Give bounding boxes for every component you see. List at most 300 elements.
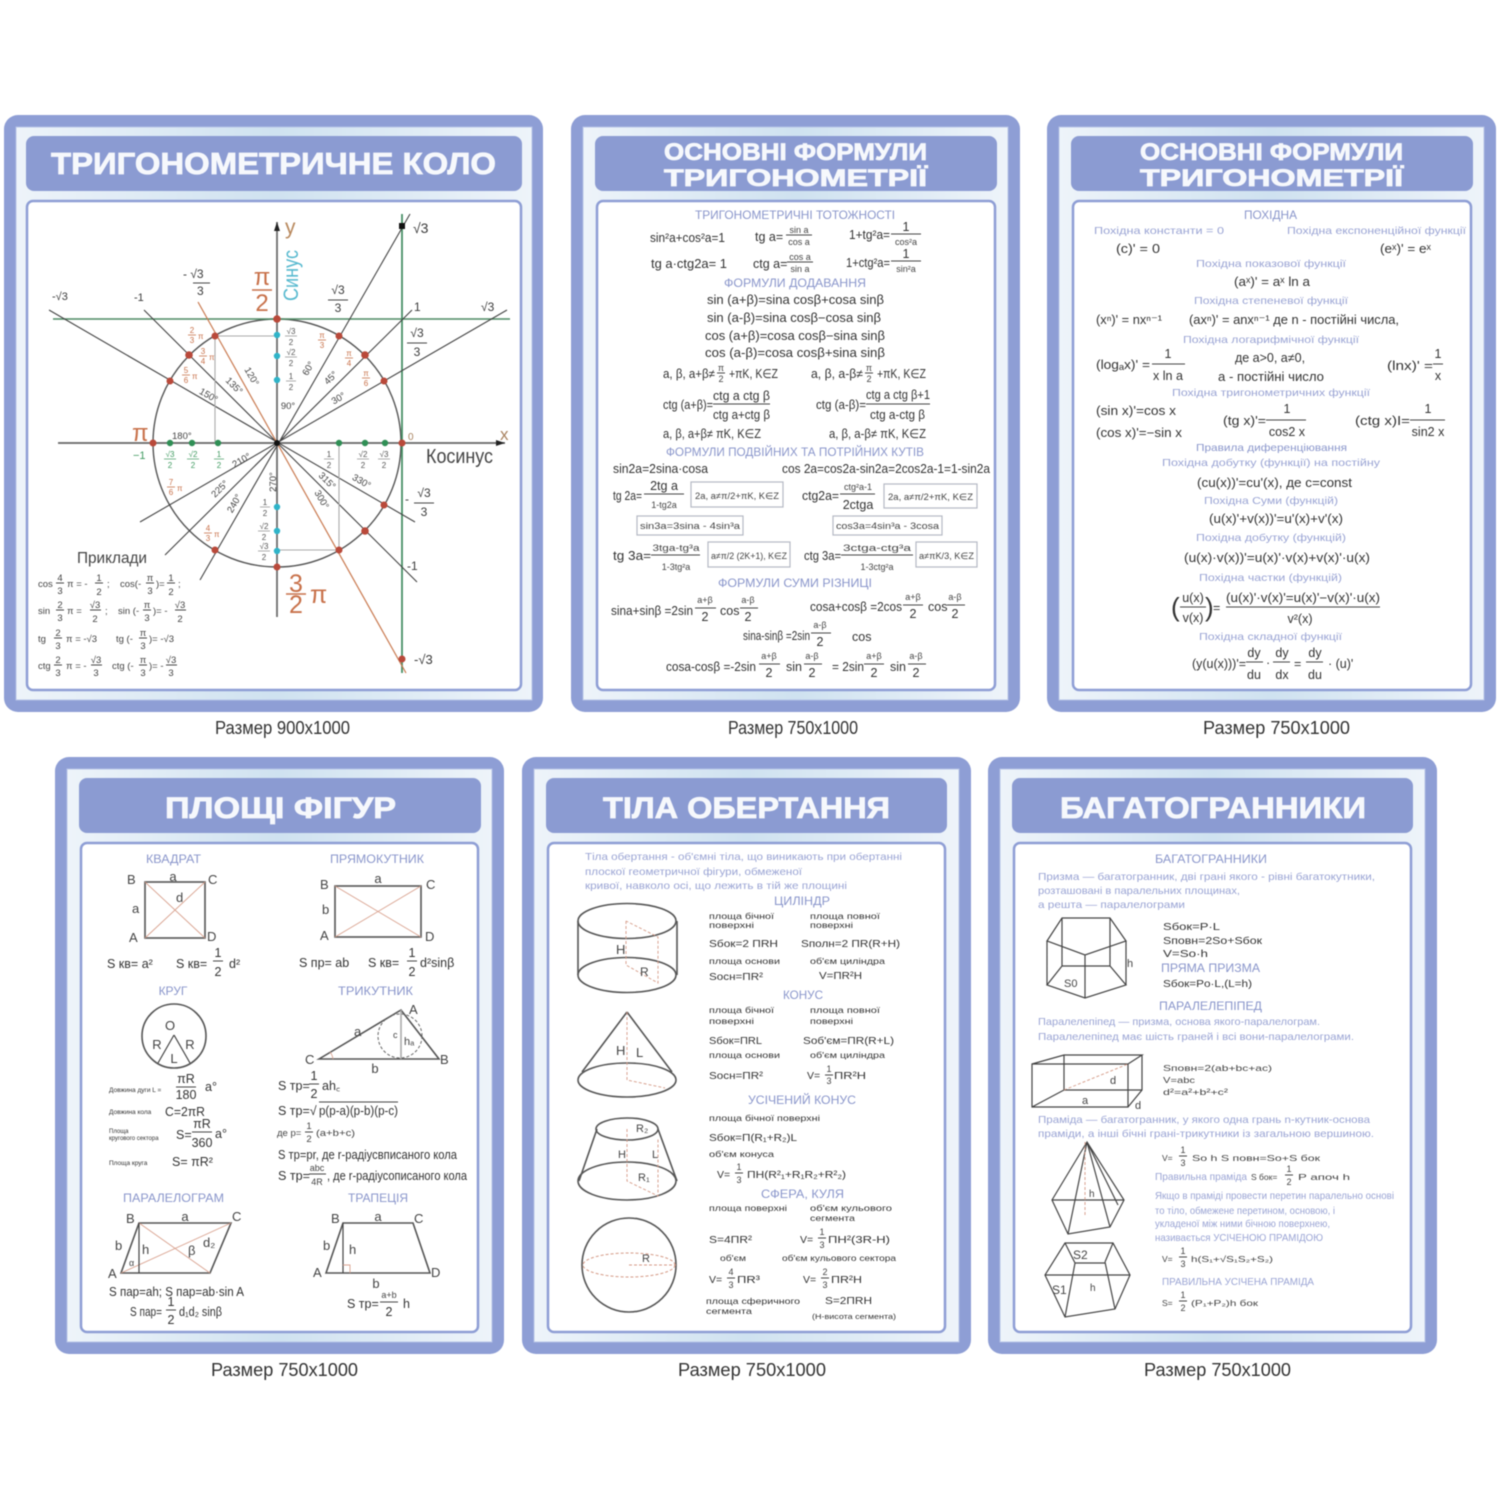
text block: examples formulas: 3 (140, 668, 146, 679)
axis labels: −1 (133, 450, 146, 462)
section: circle: S= (176, 1128, 192, 1142)
section: cylinder formulas: площа повної (810, 911, 881, 921)
text block: examples formulas: 2 (57, 600, 63, 611)
text block: parallelepiped definition (1038, 1016, 1354, 1043)
formulas: constant and exponential: Похідна показової функції (1196, 258, 1346, 270)
panel: trigonometric circle (4, 115, 543, 712)
figure: truncated cone: L (652, 1149, 658, 1161)
text block: examples formulas: √3 (166, 655, 176, 666)
formulas: power function (1096, 295, 1399, 327)
section: cylinder formulas: V=ΠR²H (819, 970, 862, 982)
tangent scale labels: -√3 (52, 291, 68, 303)
formulas: addition: a, β, a-β≠ πK, K∈Z (829, 427, 926, 441)
section: sphere formulas: 3 (728, 1280, 734, 1290)
text block: pyramid definition: праміди, а інші бічні грані-трикутники із загальною вершиною. (1038, 1128, 1374, 1140)
formulas: trigonometric functions: cos2 x (1269, 425, 1306, 439)
formulas: differentiation rules: dy (1275, 646, 1289, 660)
formulas: double and triple angles: sin3a=3sina - 4sin³a (640, 521, 740, 531)
sine value labels: √3 (260, 542, 269, 551)
degree labels: 90° (281, 401, 295, 412)
formulas: constant and exponential: (aˣ)' = aˣ ln a (1234, 275, 1310, 289)
section: cone formulas: площа основи (709, 1050, 780, 1060)
label: three pi over two: 3 (289, 570, 303, 598)
formulas: sum and difference: sin (890, 660, 906, 674)
figure: parallelepiped: d (1110, 1075, 1116, 1087)
section: truncated cone formulas: УСІЧЕНИЙ КОНУС (748, 1092, 856, 1107)
section: sphere formulas: 1 (819, 1227, 825, 1237)
formulas: pyramid: P апоч h (1298, 1172, 1350, 1182)
angle fraction labels (167, 326, 370, 543)
section: parallelogram: h (142, 1242, 149, 1257)
text block: prism definition: розташовані в паралельних площинах, (1038, 885, 1240, 897)
section: circle: πR (177, 1072, 195, 1086)
formulas: identities: cos a (788, 237, 810, 247)
formulas: double and triple angles: 2a, a≠π/2+πK, K∈Z (695, 491, 780, 501)
figure: parallelepiped: d (1135, 1100, 1141, 1112)
heading: parallelepiped: ПАРАЛЕЛЕПІПЕД (1159, 999, 1262, 1013)
section: sphere formulas: (H-висота сегмента) (812, 1312, 897, 1321)
section: parallelogram: S пар= (130, 1305, 162, 1319)
text block: prism definition: а решта — паралелограми (1038, 899, 1185, 911)
section: trapezoid: C (414, 1211, 423, 1226)
text block: examples formulas: )= (156, 579, 165, 590)
section: triangle: ah꜀ (322, 1079, 340, 1093)
section: triangle: 1 (306, 1121, 312, 1132)
text block: examples formulas (38, 573, 186, 679)
figure: truncated cone (578, 1118, 677, 1200)
panel: derivatives (1047, 115, 1496, 712)
formulas: sum and difference: 2 (809, 666, 816, 680)
formulas: logarithmic function: (logₐx)' = (1096, 358, 1150, 372)
formulas: differentiation rules: (y(u(x)))'= (1192, 657, 1246, 671)
formulas: double and triple angles: cos3a=4sin³a - 3cosa (836, 521, 939, 531)
text block: examples formulas: ; (105, 606, 108, 617)
section: truncated cone formulas: ΠH(R²₁+R₁R₂+R²₂) (747, 1169, 846, 1181)
figure: truncated pyramid: S1 (1052, 1283, 1067, 1297)
figure: truncated cone: R₁ (638, 1172, 650, 1184)
formulas: parallelepiped: Sповн=2(ab+bc+ac) (1163, 1063, 1272, 1073)
formulas: double and triple angles: tg 3a= (613, 549, 651, 563)
section: square: a (132, 901, 140, 916)
section: rectangle: C (426, 877, 435, 892)
formulas: sum and difference: 2 (952, 607, 959, 621)
text block: prism definition (1038, 871, 1375, 911)
formulas: double and triple angles: sin2a=2sina·cosa (613, 462, 708, 476)
formulas: constant and exponential: (eˣ)' = eˣ (1380, 242, 1432, 256)
formulas: sum and difference: a+β (697, 595, 713, 605)
section: truncated cone formulas: площа бічної поверхні (709, 1113, 820, 1123)
formulas: addition: ctg a-ctg β (870, 408, 925, 422)
text block: examples formulas: cos(- (120, 579, 141, 590)
section: triangle: ТРИКУТНИК (338, 984, 413, 998)
section: cone formulas: V= (807, 1070, 820, 1082)
section: cone formulas: поверхні (709, 1016, 754, 1026)
section: square: d (176, 890, 183, 905)
axis labels: 180° (172, 431, 192, 442)
title (1140, 139, 1405, 192)
degree labels: 315° (316, 470, 338, 492)
text block: pyramid definition (1038, 1114, 1374, 1140)
text block: examples formulas: 3 (147, 586, 153, 597)
formulas: addition: ctg a ctg β (713, 389, 770, 403)
text block: examples formulas: )= - (153, 606, 168, 617)
sine value labels: 1 (289, 372, 294, 381)
heading: sum and difference formulas: ФОРМУЛИ СУМИ РІЗНИЦІ (718, 576, 872, 590)
tangent scale labels: √3 (413, 220, 429, 236)
sine value labels: √2 (287, 348, 296, 357)
section: truncated cone formulas: V= (717, 1169, 730, 1181)
section: sphere formulas: СФЕРА, КУЛЯ (761, 1187, 844, 1201)
panel: basic trigonometry formulas (571, 115, 1020, 712)
formulas: addition: ctg a+ctg β (713, 408, 770, 422)
formulas: addition: a, β, a-β≠ (811, 367, 863, 381)
sine value labels: 1 (263, 498, 268, 507)
formulas: prism (1161, 921, 1262, 990)
formulas: prism: Sбок=Pо·L,(L=h) (1163, 978, 1252, 990)
section: square: 1 (215, 946, 222, 960)
caption: size 750x1000: Размер 750x1000 (1203, 718, 1350, 738)
figure: truncated pyramid: h (1090, 1283, 1096, 1294)
section: cone formulas: ΠR²H (834, 1070, 866, 1082)
figure: cylinder (578, 904, 677, 992)
formulas: addition: a, β, a+β≠ πK, K∈Z (663, 427, 761, 441)
cosine value labels: √3 (380, 450, 389, 459)
formulas: differentiation rules: du (1247, 668, 1261, 682)
section: sphere formulas: V= (803, 1274, 816, 1286)
label: three pi over two: π (310, 581, 327, 609)
formulas: identities (650, 220, 921, 274)
section: cylinder formulas: площа бічної (709, 911, 775, 921)
figure: truncated pyramid: S2 (1073, 1248, 1088, 1262)
text block: examples formulas: √3 (175, 600, 185, 611)
degree labels: 270° (268, 472, 279, 492)
formulas: identities: ctg a= (753, 257, 787, 271)
formulas: pyramid: V= (1162, 1153, 1173, 1163)
section: triangle: hₐ (404, 1036, 415, 1048)
section: rectangle: b (322, 902, 329, 917)
formulas: pyramid: (P₁+P₂)h бок (1191, 1298, 1258, 1308)
formulas: logarithmic function: a - постійні число (1218, 370, 1324, 384)
section: trapezoid: B (331, 1211, 340, 1226)
degree labels: 330° (350, 472, 373, 492)
section: cone formulas: Sоб'єм=ΠR(R+L) (803, 1035, 894, 1047)
text block: examples formulas: π (140, 628, 147, 639)
formulas: power function: (axⁿ)' = anxⁿ⁻¹ де n - постійні числа, (1189, 313, 1399, 327)
formulas: pyramid (1155, 1145, 1394, 1313)
formulas: double and triple angles: cos 2a=cos2a-sin2a=2cos2a-1=1-sin2a (782, 462, 990, 476)
formulas: addition: +πK, K∈Z (877, 367, 926, 381)
section: triangle: (a+b+c) (316, 1128, 355, 1139)
formulas: addition: π (718, 363, 724, 373)
degree labels: 45° (322, 369, 340, 387)
text block: examples formulas: 2 (168, 587, 174, 598)
caption: size 900x1000: Размер 900x1000 (215, 718, 350, 738)
formulas: pyramid: то тіло, обмежене перетином, основою, і (1155, 1205, 1335, 1217)
degree labels: 150° (197, 386, 220, 406)
section: circle: L (170, 1051, 178, 1066)
text block: definition (585, 851, 902, 892)
formulas: double and triple angles: a≠πK/3, K∈Z (919, 551, 975, 561)
formulas: trigonometric functions: 1 (1425, 402, 1432, 416)
section: rectangle: 1 (409, 946, 416, 960)
cosine value labels: √2 (359, 450, 368, 459)
text block: parallelepiped definition: Паралелепіпед — призма, основа якого-паралелограм. (1038, 1016, 1320, 1028)
section: truncated cone formulas: об'єм конуса (709, 1149, 774, 1159)
section: circle: Площа круга (109, 1160, 148, 1167)
cosine value labels: 2 (382, 461, 387, 470)
formulas: double and triple angles: 2tg a (650, 479, 678, 493)
formulas: identities: 1+tg²a= (849, 228, 890, 242)
section: circle: Довжина дуги L = (109, 1087, 161, 1094)
formulas: sum and difference: a+β (905, 592, 921, 602)
angle fraction labels: π (177, 484, 183, 493)
text block: examples formulas: √3 (91, 655, 101, 666)
section: triangle: 4R (311, 1177, 323, 1187)
section: trapezoid: a (374, 1209, 382, 1224)
formulas: sum and difference: a+β (866, 651, 882, 661)
caption: size 750x1000: Размер 750x1000 (728, 718, 858, 738)
sine value labels: 2 (289, 338, 294, 347)
section: rectangle: d²sinβ (420, 956, 454, 970)
text block: examples formulas: 2 (177, 614, 183, 625)
caption: size 750x1000: Размер 750x1000 (678, 1360, 826, 1380)
section: sphere formulas: 3 (819, 1240, 825, 1250)
section: cylinder formulas (709, 894, 900, 983)
cosine value labels: 2 (191, 461, 196, 470)
text block: examples formulas: π = - (67, 579, 88, 590)
section: sphere formulas: об'єм кульового сектора (782, 1253, 896, 1263)
heading: identities: ТРИГОНОМЕТРИЧНІ ТОТОЖНОСТІ (695, 208, 895, 222)
section: sphere formulas: 3 (822, 1280, 828, 1290)
formulas: differentiation rules: dx (1275, 668, 1289, 682)
formulas: pyramid: 2 (1180, 1303, 1186, 1313)
formulas: differentiation rules: v(x) (1183, 611, 1203, 625)
formulas: sum and difference: = 2sin (832, 660, 864, 674)
section: sphere formulas (706, 1187, 897, 1321)
angle fraction labels: 3 (206, 534, 211, 543)
section: rectangle: D (425, 929, 434, 944)
formulas: sum and difference (611, 592, 965, 680)
formulas: sum and difference: a-β (805, 651, 819, 661)
axis labels: y (285, 216, 296, 239)
axis labels: x (500, 425, 509, 444)
axis labels: Синус (280, 250, 303, 301)
text block: examples formulas: 1 (96, 573, 102, 584)
section: sphere formulas: V= (709, 1274, 722, 1286)
figure: cone: H (616, 1043, 625, 1058)
axis labels (132, 216, 509, 468)
section: rectangle: 2 (409, 965, 416, 979)
section: triangle: , де r-радіусописаного кола (327, 1169, 467, 1183)
section: cylinder formulas: Sполн=2 ΠR(R+H) (801, 938, 900, 950)
tangent scale labels: 3 (414, 345, 421, 359)
section: circle: R (152, 1037, 162, 1052)
cosine value labels: √2 (189, 450, 198, 459)
formulas: parallelepiped (1163, 1063, 1272, 1097)
section: parallelogram: α (129, 1258, 134, 1268)
section: square: A (129, 930, 138, 945)
formulas: identities: sin²a (896, 264, 916, 274)
angle fraction labels: 3 (201, 347, 206, 356)
angle fraction labels: π (319, 331, 325, 340)
cosine value labels: 2 (217, 461, 222, 470)
formulas: sum and difference: cos (852, 630, 871, 644)
formulas: differentiation rules: = (1294, 657, 1301, 671)
formulas: differentiation rules: Похідна частки (функцій) (1199, 572, 1342, 584)
formulas: addition: sin (a+β)=sina cosβ+cosa sinβ (707, 293, 884, 307)
formulas: prism: ПРЯМА ПРИЗМА (1161, 961, 1260, 975)
formulas: differentiation rules: ( (1171, 592, 1180, 622)
degree labels: 135° (223, 375, 245, 397)
formulas: addition: 2 (866, 374, 872, 384)
section: sphere formulas: об'єм (720, 1253, 746, 1263)
angle fraction labels: 2 (190, 326, 195, 335)
tangent scale labels: √3 (417, 486, 431, 500)
formulas: addition: ctg (a+β)= (663, 398, 713, 412)
title: trigonometric circle: ТРИГОНОМЕТРИЧНЕ КОЛО (51, 146, 496, 181)
section: square: 2 (215, 965, 222, 979)
text block: examples formulas: sin (38, 606, 50, 617)
sine value labels (258, 327, 297, 562)
text block: examples formulas: ctg (38, 661, 51, 672)
angle fraction labels: 6 (184, 376, 189, 385)
tangent scale labels: √3 (410, 326, 424, 340)
section: parallelogram: a (181, 1209, 189, 1224)
section: rectangle: B (320, 877, 329, 892)
section: trapezoid: D (431, 1265, 440, 1280)
text block: examples formulas: 3 (168, 668, 174, 679)
formulas: sum and difference: 2 (871, 666, 878, 680)
formulas: addition: sin (a-β)=sina cosβ−cosa sinβ (707, 311, 881, 325)
tangent scale labels: 3 (421, 505, 428, 519)
tangent scale labels: - (405, 492, 409, 506)
title: ТРИГОНОМЕТРІЇ (664, 165, 929, 192)
text block: examples formulas: 3 (93, 668, 99, 679)
formulas: addition: cos (a-β)=cosa cosβ+sina sinβ (705, 346, 885, 360)
section: sphere formulas: площа сферичного (706, 1296, 800, 1306)
label: three pi over two: 2 (289, 591, 303, 619)
formulas: identities: 1+ctg²a= (846, 256, 890, 270)
text block: examples formulas: π (144, 600, 151, 611)
section: sphere formulas: площа поверхні (709, 1203, 787, 1213)
section: triangle: c (393, 1030, 398, 1040)
section: parallelogram: d₁d₂ sinβ (179, 1305, 222, 1319)
formulas: differentiation rules: ) (1205, 592, 1214, 622)
formulas: differentiation rules: (u(x)'·v(x)'=u(x)'−v(x)'·u(x) (1226, 591, 1380, 605)
text block: examples formulas: π (140, 655, 147, 666)
angle fraction labels: π (214, 530, 220, 539)
section: trapezoid: b (372, 1276, 380, 1291)
cosine value labels: 1 (327, 450, 332, 459)
text block: examples formulas: )= -√3 (149, 634, 174, 645)
tangent scale labels (52, 220, 495, 667)
section: trapezoid (313, 1191, 440, 1319)
section: trapezoid: a+b (381, 1290, 397, 1300)
sine value labels: 2 (262, 533, 267, 542)
label: pi over two: π (254, 264, 270, 291)
angle fraction labels: 7 (169, 478, 174, 487)
text block: parallelepiped definition: Паралелепіпед має шість граней і всі вони-паралелограми. (1038, 1031, 1354, 1043)
section: sphere formulas: V= (800, 1234, 813, 1246)
figure: sphere (582, 1218, 676, 1312)
formulas: identities: tg a·ctg2a= 1 (651, 257, 727, 271)
section: triangle (277, 984, 467, 1187)
section: square: S кв= a² (107, 957, 153, 971)
formulas: differentiation rules: v²(x) (1288, 612, 1312, 626)
formulas: differentiation rules: = (1213, 601, 1220, 615)
section: square: C (208, 872, 217, 887)
label: three pi over two (286, 570, 327, 619)
title: ТРИГОНОМЕТРІЇ (1140, 165, 1405, 192)
section: sphere formulas: ΠR³ (737, 1274, 761, 1286)
section: triangle: S тр= (278, 1079, 310, 1093)
formulas: logarithmic function: 1 (1435, 347, 1442, 361)
section: triangle: S тр= (278, 1169, 310, 1183)
formulas: trigonometric functions: sin2 x (1412, 425, 1445, 439)
formulas: trigonometric functions: 1 (1284, 402, 1291, 416)
sine value labels: 2 (289, 359, 294, 368)
tangent scale labels: √3 (481, 300, 495, 314)
section: circle: R (185, 1037, 195, 1052)
formulas: double and triple angles: 3ctga-ctg³a (843, 543, 911, 553)
formulas: sum and difference: a+β (761, 651, 777, 661)
text block: examples formulas: 4 (57, 573, 63, 584)
section: truncated cone formulas: 3 (736, 1175, 742, 1185)
panel: areas of figures (55, 757, 504, 1354)
formulas: identities: cos²a (895, 237, 917, 247)
formulas: addition: a, β, a+β≠ (663, 367, 715, 381)
formulas: pyramid: називається УСІЧЕНОЮ ПРАМІДОЮ (1155, 1232, 1323, 1244)
tangent scale labels: - √3 (183, 267, 204, 281)
section: parallelogram (108, 1191, 245, 1327)
section: cone formulas: поверхні (810, 1016, 853, 1026)
formulas: sum and difference: cos (928, 600, 947, 614)
section: cone formulas (709, 988, 894, 1086)
section: cone formulas: Sосн=ΠR² (709, 1070, 764, 1082)
text block: examples formulas: cos (38, 579, 53, 590)
formulas: identities: sin a (790, 264, 810, 274)
section: sphere formulas: ΠR²H (831, 1274, 862, 1286)
section: trapezoid: h (349, 1242, 356, 1257)
section: sphere formulas: 4 (728, 1267, 734, 1277)
section: parallelogram: b (115, 1238, 122, 1253)
section: triangle: S тр=√ (278, 1104, 317, 1118)
figure: parallelepiped: a (1082, 1095, 1089, 1107)
figure: pyramid: h (1089, 1189, 1095, 1200)
figure: cone: L (636, 1045, 643, 1060)
text block: examples formulas: 3 (55, 641, 61, 652)
formulas: differentiation rules: · (1266, 656, 1270, 670)
section: cylinder formulas: ЦИЛІНДР (774, 894, 830, 908)
formulas: differentiation rules: (u(x)·v(x))'=u(x)'·v(x)+v(x)'·u(x) (1184, 551, 1370, 565)
formulas: sum and difference: 2 (910, 607, 917, 621)
tangent scale labels: -√3 (414, 652, 433, 667)
formulas: sum and difference: 2 (766, 666, 773, 680)
degree labels: 300° (311, 488, 331, 511)
formulas: trigonometric functions: (tg x)'= (1223, 414, 1266, 428)
section: parallelogram: S пар=ah; S пар=ab·sin A (109, 1285, 245, 1299)
axis labels: Косинус (426, 446, 493, 468)
angle fraction labels: π (198, 332, 204, 341)
text block: examples formulas: 3 (140, 641, 146, 652)
section: circle: Площа (109, 1129, 129, 1135)
title: ПЛОЩІ ФІГУР (165, 792, 396, 825)
formulas: addition: ctg a ctg β+1 (866, 388, 930, 402)
section: square: S кв= (176, 957, 207, 971)
angle fraction labels: π (209, 353, 215, 362)
section: triangle: b (371, 1061, 379, 1076)
formulas: differentiation rules: dy (1247, 646, 1261, 660)
